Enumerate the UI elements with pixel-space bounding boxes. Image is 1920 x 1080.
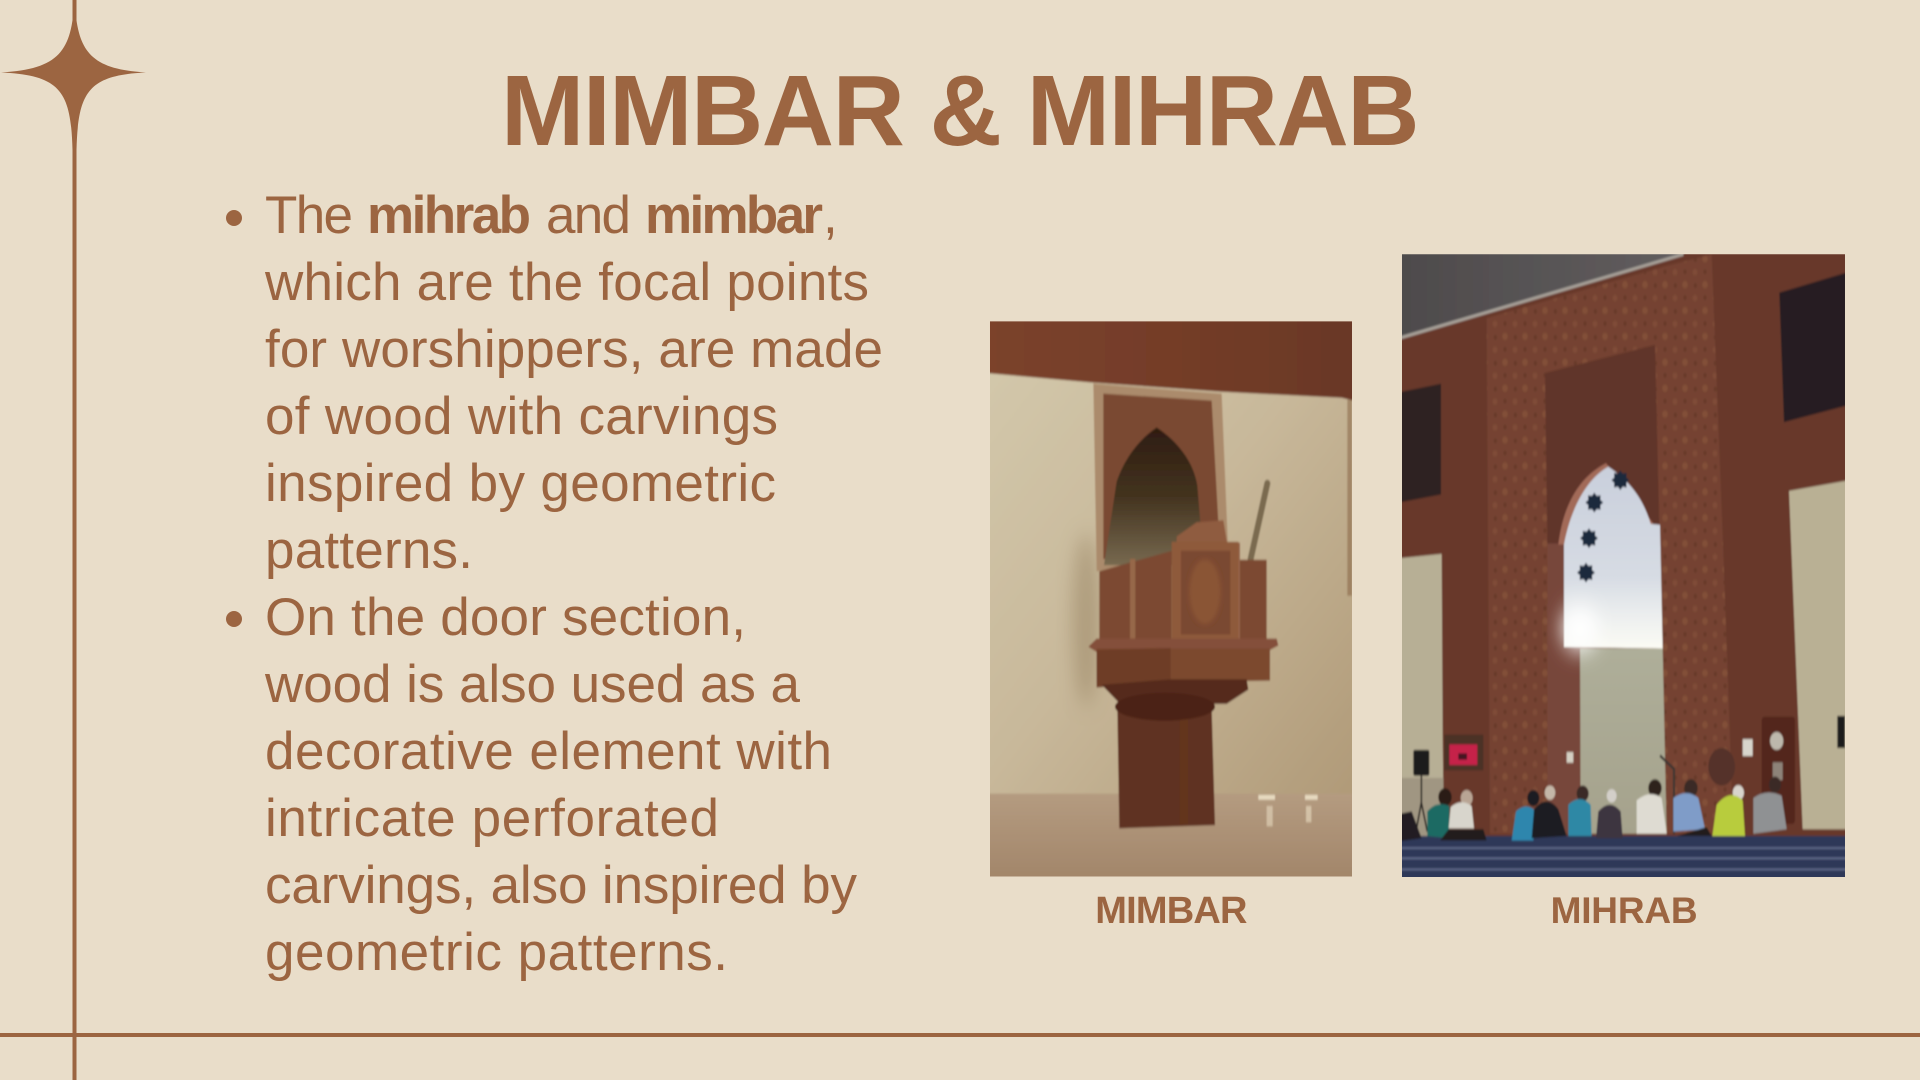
first bullet text: mimbar bbox=[645, 186, 823, 245]
photo: mihrab bbox=[1390, 240, 1857, 892]
niche arch bbox=[1104, 428, 1201, 565]
arch jamb left bbox=[1547, 544, 1581, 834]
post bbox=[1117, 708, 1215, 828]
spear bbox=[1251, 483, 1267, 559]
right cream panel bbox=[1788, 479, 1845, 831]
second bullet text: geometric patterns. bbox=[265, 923, 728, 982]
photo: mimbar bbox=[980, 310, 1363, 892]
first bullet text: The bbox=[265, 186, 353, 245]
icon: four-point star bbox=[1, 0, 146, 150]
second bullet text: carvings, also inspired by bbox=[265, 856, 858, 915]
lower alcove bbox=[1580, 648, 1667, 834]
light switch bbox=[1567, 752, 1573, 763]
first bullet text: which are the focal points bbox=[264, 253, 869, 312]
lamp reflections bbox=[1258, 795, 1318, 826]
arch stars bbox=[1577, 470, 1629, 582]
second bullet text: wood is also used as a bbox=[264, 655, 801, 714]
carpet bbox=[1402, 834, 1845, 877]
lower tile band bbox=[990, 793, 1352, 876]
plaster wall bbox=[980, 371, 1363, 800]
first bullet text: mihrab bbox=[367, 186, 531, 245]
top wood band bbox=[990, 321, 1352, 402]
glare bbox=[1562, 606, 1598, 651]
niche panel bbox=[1103, 394, 1218, 559]
left cream panel bbox=[1402, 552, 1444, 780]
right speaker bbox=[1837, 716, 1845, 748]
bowl bbox=[1115, 693, 1215, 721]
right dark artwork bbox=[1778, 272, 1845, 423]
second bullet text: intricate perforated bbox=[265, 789, 719, 848]
horizontal rule bbox=[0, 1033, 1920, 1037]
grandfather clock bbox=[1762, 717, 1795, 824]
patterned pillars bbox=[1487, 254, 1733, 834]
vertical rule bbox=[72, 0, 76, 1080]
first bullet text: inspired by geometric bbox=[265, 454, 776, 513]
first bullet text bbox=[264, 186, 883, 580]
first bullet text: of wood with carvings bbox=[265, 387, 778, 446]
second bullet text: On the door section, bbox=[265, 588, 746, 647]
first bullet text: patterns. bbox=[265, 521, 473, 580]
pulpit side panels bbox=[1099, 551, 1172, 643]
title: MIMBAR & MIHRAB bbox=[501, 55, 1418, 167]
arch opening bbox=[1564, 467, 1663, 648]
pulpit ledge bbox=[1088, 639, 1278, 652]
left dark artwork bbox=[1402, 383, 1442, 503]
wall fan bbox=[1708, 748, 1735, 786]
worshippers bbox=[1390, 777, 1787, 843]
LED sign bbox=[1444, 735, 1483, 770]
niche frame bbox=[1093, 383, 1228, 571]
first bullet text: for worshippers, are made bbox=[265, 320, 883, 379]
pulpit front bbox=[1172, 542, 1238, 642]
step block bbox=[1176, 520, 1227, 543]
arch rim bbox=[1558, 463, 1653, 544]
left lower tile bbox=[1402, 778, 1443, 838]
shadow beside pulpit bbox=[1073, 534, 1099, 706]
ceiling bbox=[1402, 254, 1678, 336]
second bullet text bbox=[264, 588, 858, 982]
upper niche bbox=[1545, 345, 1659, 544]
right wood edge bbox=[1347, 400, 1352, 596]
second bullet text: decorative element with bbox=[265, 722, 832, 781]
wall notice bbox=[1743, 739, 1753, 756]
speaker bbox=[1413, 750, 1429, 832]
bullet marker one bbox=[226, 210, 242, 226]
caption: mihrab: MIHRAB bbox=[1551, 890, 1697, 931]
first bullet text: , bbox=[823, 186, 838, 245]
pulpit base bbox=[1170, 648, 1271, 682]
caption: mimbar: MIMBAR bbox=[1095, 890, 1247, 932]
microphone stand bbox=[1660, 756, 1674, 834]
first bullet text: and bbox=[546, 186, 631, 245]
bullet marker two bbox=[226, 611, 242, 627]
text block: description bullets bbox=[226, 186, 883, 982]
under steps bbox=[1102, 679, 1248, 704]
